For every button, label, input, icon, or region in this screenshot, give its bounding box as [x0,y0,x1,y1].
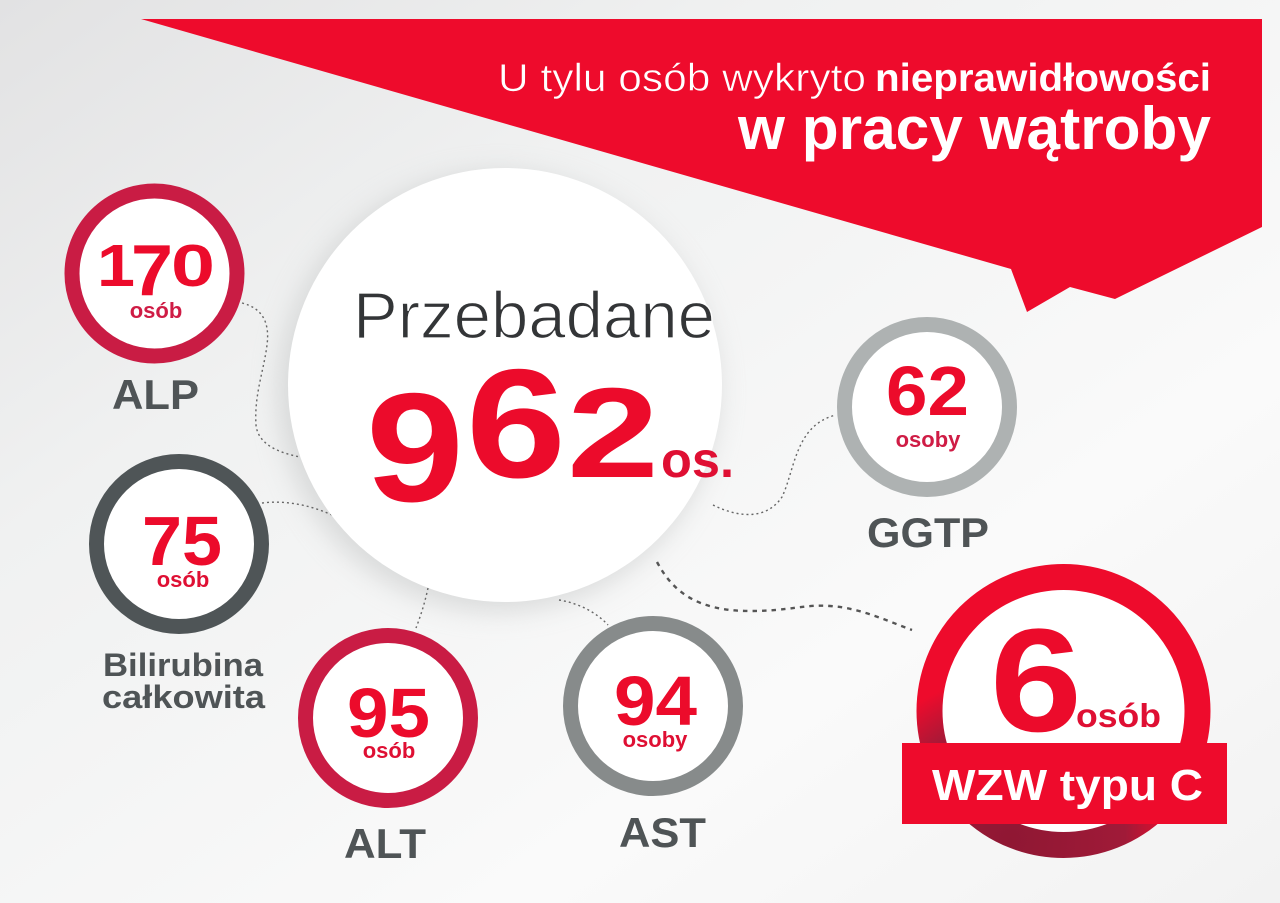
value: 95: 95 [347,674,430,752]
name: Bilirubina [103,647,263,683]
value: 75: 75 [142,502,222,580]
name: ALP [112,371,199,418]
central circle shadow [278,172,718,612]
metric: WZW typu C [902,577,1227,845]
value: 962 [366,337,659,534]
value: 170: 0 [171,233,215,299]
value: 170: 7 [131,231,173,311]
metric: AST [570,624,736,856]
header banner [141,19,1262,312]
metric: Bilirubina: całkowita [102,679,265,715]
metric: ALT [306,636,470,867]
metric: ALP [72,191,237,418]
central circle [288,168,734,602]
value: 962: 2 [567,362,659,505]
value: 62: 62 [886,352,969,430]
heading line 2: w pracy wątroby [737,95,1212,162]
value: 94: 94 [614,662,697,740]
name: ALT [344,820,426,867]
value: 170 [97,231,215,311]
value: 962: 6 [466,337,566,510]
value: 170: 1 [97,233,135,299]
unit: osób [363,738,415,763]
metric: Bilirubina [96,462,265,715]
heading line 1 light: U tylu osób wykryto [498,57,866,100]
name: GGTP [867,509,989,556]
label: Przebadane: Przebadane [353,278,715,352]
metric: GGTP [844,324,1010,556]
label text: WZW typu C [932,761,1203,810]
unit: osób [1076,697,1161,734]
name: AST [619,809,706,856]
dotted connectors [242,303,912,630]
heading line 1 bold: nieprawidłowości [875,57,1211,100]
unit: osób [157,567,209,592]
unit: osoby [896,427,961,452]
value: 962: 9 [366,361,464,534]
value: 6: 6 [990,599,1082,763]
unit: osoby [623,727,688,752]
unit: osób [130,298,182,323]
unit: os.: os. [661,432,734,488]
label banner [902,743,1227,824]
